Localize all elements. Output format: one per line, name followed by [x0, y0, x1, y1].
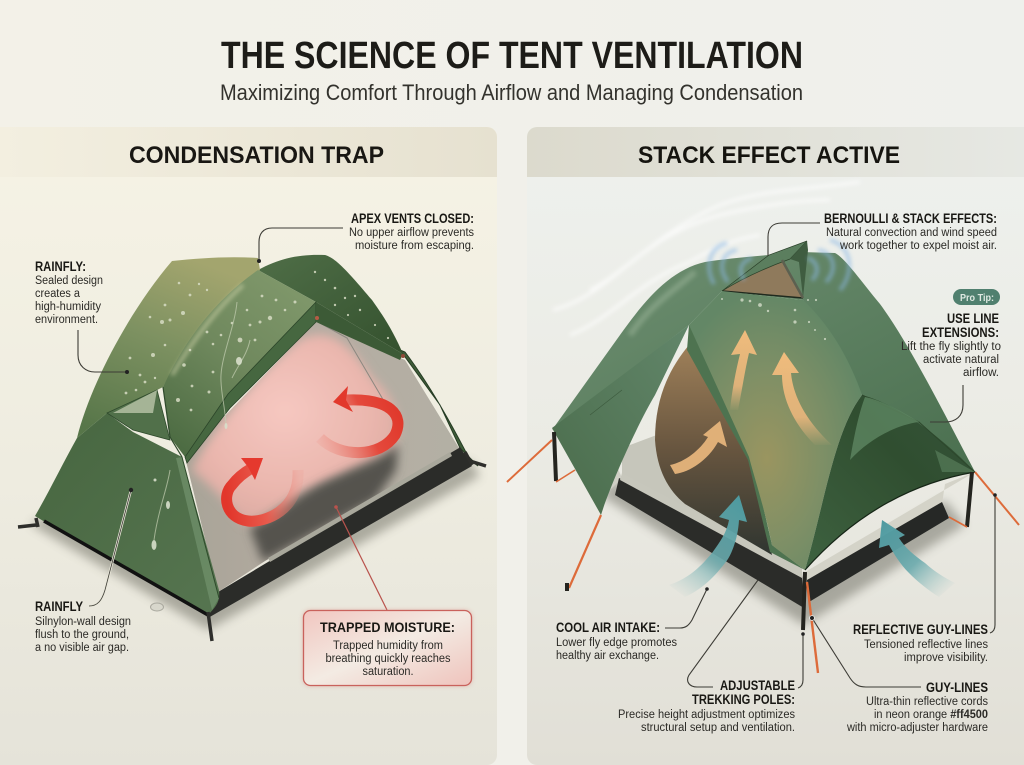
callout: trapped moisture [303, 505, 472, 686]
callout: guy-lines: Ultra-thin reflective cords [866, 696, 988, 708]
heading: condensation trap: CONDENSATION TRAP [129, 142, 384, 169]
badge: pro tip: Pro Tip: [960, 293, 994, 304]
callout: guy-lines: GUY-LINES [926, 680, 988, 695]
right floor [807, 502, 949, 602]
callout: pro tip use line extensions [901, 289, 1001, 422]
callout: guy-lines [810, 616, 988, 734]
black hem [44, 521, 208, 615]
central panel [689, 291, 862, 570]
left floor [615, 478, 804, 608]
callout: adjustable trekking poles: ADJUSTABLE [720, 678, 795, 693]
callout: cool air intake [556, 587, 709, 662]
callout: adjustable trekking poles: structural setup and ventilation. [641, 722, 795, 734]
sheen on roof [630, 272, 695, 335]
arrow: cool air intake right [879, 520, 955, 597]
callout: pro tip use line extensions: airflow. [963, 367, 999, 379]
stakes and poles [18, 452, 486, 641]
callout: rainfly sealed: Sealed design [35, 275, 103, 287]
callout: pro tip use line extensions: activate natural [923, 354, 999, 366]
callout: trapped moisture: breathing quickly reaches [326, 653, 451, 665]
door opening [655, 345, 772, 555]
roof left panel [77, 257, 260, 438]
callout: rainfly sealed: environment. [35, 314, 98, 326]
callout: guy-lines: with micro-adjuster hardware [846, 722, 988, 734]
callout: apex vents closed: No upper airflow prevents [349, 227, 474, 239]
callout: guy-lines: in neon orange #ff4500 [874, 709, 988, 721]
callout: pro tip use line extensions: EXTENSIONS: [922, 325, 999, 340]
vent triangle [722, 262, 803, 298]
droplets [721, 298, 826, 340]
right vestibule [805, 395, 975, 570]
dark shadow inside [250, 444, 398, 562]
callout: rainfly silnylon: Silnylon-wall design [35, 616, 131, 628]
callout: reflective guy-lines: improve visibility. [904, 652, 988, 664]
vent flap [722, 241, 807, 291]
left vestibule door flap [552, 325, 689, 515]
callout: adjustable trekking poles: Precise height adjustment optimizes [618, 709, 795, 721]
callout: reflective guy-lines [853, 493, 997, 664]
mesh shading [192, 335, 398, 562]
callout: cool air intake: healthy air exchange. [556, 650, 659, 662]
callout: cool air intake: Lower fly edge promotes [556, 637, 677, 649]
tent: stack effect ventilated [507, 241, 1019, 673]
callout: bernoulli and stack effects: work together to expel moist air. [839, 240, 997, 252]
panel: stack effect active [507, 127, 1024, 765]
callout: bernoulli and stack effects: Natural convection and wind speed [826, 227, 997, 239]
callout: bernoulli and stack effects [768, 211, 997, 256]
callout: rainfly silnylon: a no visible air gap. [35, 642, 129, 654]
subtitle: Maximizing Comfort Through Airflow and Managing Condensation [220, 80, 803, 105]
callout: rainfly silnylon: RAINFLY [35, 599, 83, 614]
callout: adjustable trekking poles [618, 580, 805, 734]
callout: rainfly sealed: RAINFLY: [35, 259, 86, 274]
callout: trapped moisture: TRAPPED MOISTURE: [320, 620, 455, 635]
callout: pro tip use line extensions: Lift the fly slightly to [901, 341, 1001, 353]
arrow: warm air rising 1 [730, 330, 757, 410]
flap strip [185, 302, 316, 463]
side wall behind door [622, 430, 802, 574]
callout: rainfly silnylon [35, 488, 133, 654]
callout: apex vents closed: moisture from escaping. [355, 240, 474, 252]
callout: reflective guy-lines: REFLECTIVE GUY-LINES [853, 622, 988, 637]
callout: rainfly sealed: high-humidity [35, 301, 101, 313]
callout: apex vents closed: APEX VENTS CLOSED: [351, 211, 474, 226]
lower front panel [35, 413, 219, 615]
pink moisture cloud [192, 335, 398, 525]
door side pleat [687, 325, 805, 570]
sheen [172, 285, 243, 375]
front pleat [176, 457, 219, 610]
water runs [154, 302, 250, 540]
air ripples at vents [709, 240, 849, 290]
arrow: cool air intake left [669, 495, 747, 597]
icon: water droplet on ground [150, 603, 164, 611]
callout: rainfly sealed: creates a [35, 288, 81, 300]
callout: apex vents closed [257, 211, 474, 263]
mesh interior [185, 322, 459, 592]
tent: sealed with trapped moisture [18, 255, 486, 641]
arrow: warm air in door [670, 421, 727, 474]
callout: pro tip use line extensions: USE LINE [947, 311, 999, 326]
main roof [552, 252, 975, 472]
vestibule vent [107, 390, 170, 440]
callout: trapped moisture: Trapped humidity from [333, 640, 443, 652]
right dark roof [258, 255, 403, 354]
inner pole line [318, 322, 395, 420]
panel: condensation trap [0, 127, 497, 765]
callout: trapped moisture: saturation. [362, 666, 414, 678]
roof middle band [163, 270, 316, 457]
back right wing [400, 350, 478, 466]
callout: rainfly silnylon: flush to the ground, [35, 629, 129, 641]
heading: stack effect active: STACK EFFECT ACTIVE [638, 142, 900, 169]
floor band [208, 447, 472, 618]
callout: reflective guy-lines: Tensioned reflective lines [864, 639, 988, 651]
arrow: red circulation upper [320, 386, 398, 453]
droplets [125, 271, 389, 411]
callout: rainfly sealed [35, 259, 129, 374]
callout: adjustable trekking poles: TREKKING POLES: [692, 692, 795, 707]
poles and guy lines [507, 432, 1019, 673]
wind streams [553, 182, 860, 335]
title: THE SCIENCE OF TENT VENTILATION [221, 35, 803, 77]
callout: cool air intake: COOL AIR INTAKE: [556, 620, 660, 635]
arrow: red circulation lower [227, 458, 298, 521]
right mesh wall [805, 472, 975, 584]
arrow: warm air rising 2 [772, 352, 832, 445]
